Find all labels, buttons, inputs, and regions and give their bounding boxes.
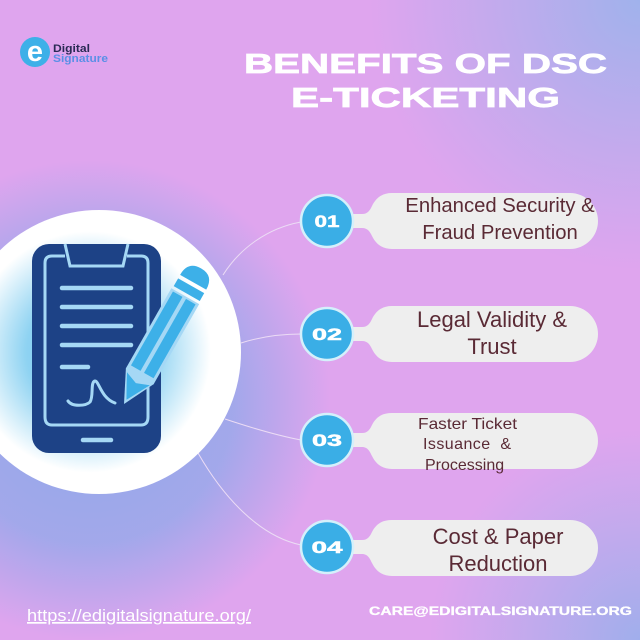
icon: phone xyxy=(32,244,161,453)
illustration: circle with phone and pen xyxy=(0,210,241,494)
item 03: Faster Ticket Issuance & Processing: Processing xyxy=(425,457,504,474)
item 02: Legal Validity & Trust: Legal Validity & xyxy=(417,307,567,332)
connector lines xyxy=(198,222,301,545)
title: BENEFITS OF DSC xyxy=(244,48,607,79)
item 02: Legal Validity & Trust: 02 xyxy=(312,325,342,344)
logo: eDigital Signature: e xyxy=(27,36,43,68)
logo: eDigital Signature xyxy=(20,36,108,68)
title xyxy=(244,48,607,113)
item 01: Enhanced Security & Fraud Prevention: Fraud Prevention xyxy=(422,222,578,244)
item 01: Enhanced Security & Fraud Prevention xyxy=(301,193,598,249)
title: E-TICKETING xyxy=(291,82,560,113)
item 04: Cost & Paper Reduction xyxy=(301,520,598,576)
item 02: Legal Validity & Trust xyxy=(301,306,598,362)
item 01: Enhanced Security & Fraud Prevention: Enhanced Security & xyxy=(405,195,595,217)
email: CARE@EDIGITALSIGNATURE.ORG xyxy=(369,604,632,618)
white circle xyxy=(0,210,241,494)
item 04: Cost & Paper Reduction: Reduction xyxy=(448,551,548,576)
logo: eDigital Signature: Signature xyxy=(53,53,108,65)
item 04: Cost & Paper Reduction: Cost & Paper xyxy=(433,524,563,549)
item 03: Faster Ticket Issuance & Processing: Faster Ticket xyxy=(418,416,518,433)
item 03: Faster Ticket Issuance & Processing xyxy=(301,413,598,474)
icon: pen xyxy=(110,260,215,412)
item 01: Enhanced Security & Fraud Prevention: 01 xyxy=(314,212,340,231)
item 02: Legal Validity & Trust: Trust xyxy=(467,334,517,359)
logo: eDigital Signature: Digital xyxy=(53,43,90,55)
item 04: Cost & Paper Reduction: 04 xyxy=(312,538,343,557)
item 03: Faster Ticket Issuance & Processing: Issuance & xyxy=(423,436,511,453)
website link: https://edigitalsignature.org/ xyxy=(27,606,251,625)
item 03: Faster Ticket Issuance & Processing: 03 xyxy=(312,431,342,450)
